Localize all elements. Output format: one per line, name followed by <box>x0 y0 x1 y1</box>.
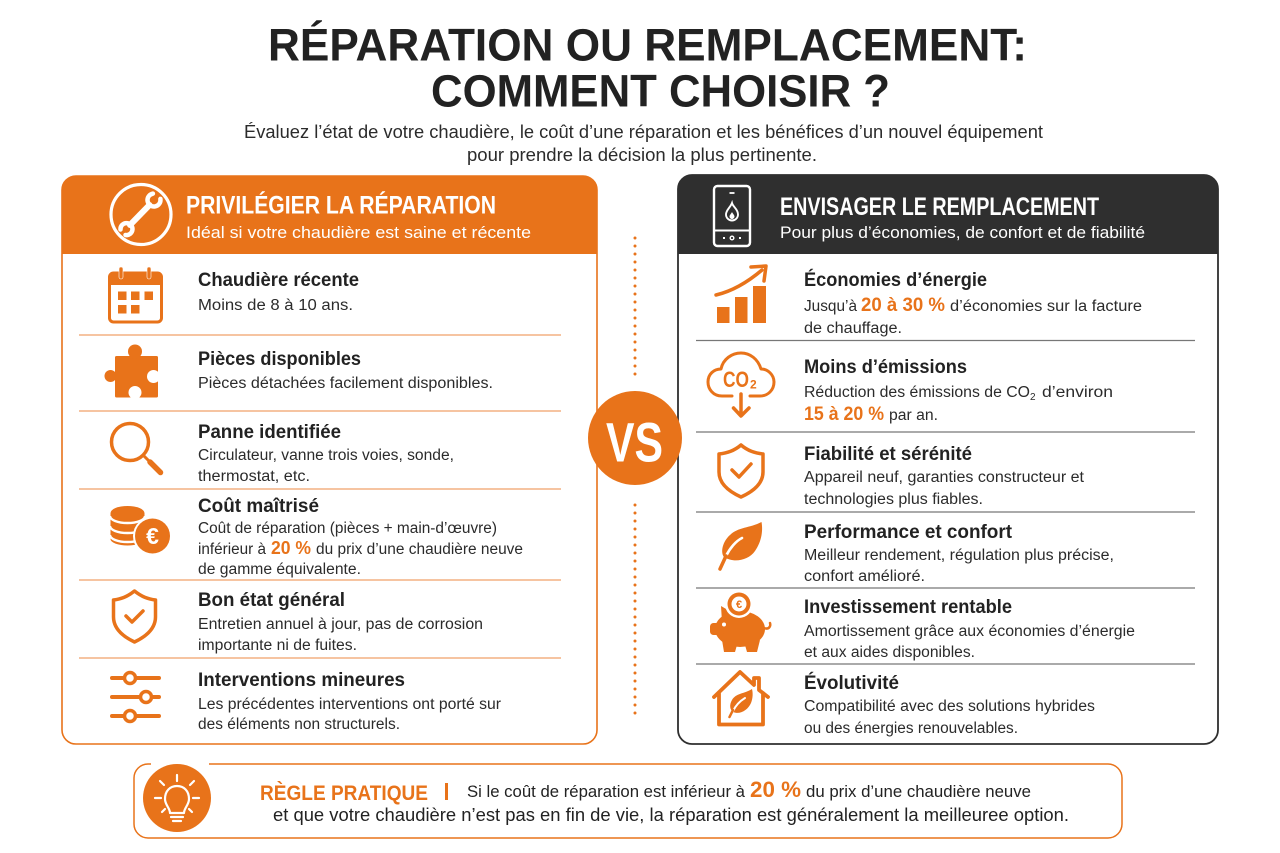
row: performance et confort: Performance et confort <box>804 522 1013 543</box>
row: panne identifiée: Panne identifiée <box>198 422 341 443</box>
row: bon état général: Entretien annuel à jour, pas de corrosion <box>198 616 483 633</box>
icon: wrench <box>111 184 171 244</box>
row: interventions mineures: des éléments non structurels. <box>198 716 400 733</box>
row: coût maîtrisé: 20 % <box>271 538 311 558</box>
row: pièces disponibles: Pièces disponibles <box>198 349 361 370</box>
row: économies d'énergie: Économies d’énergie <box>804 269 987 291</box>
icon: piggy bank <box>710 590 770 652</box>
row: panne identifiée <box>112 422 454 485</box>
row: panne identifiée: thermostat, etc. <box>198 468 310 485</box>
icon: sliders <box>112 672 159 722</box>
row: coût maîtrisé: inférieur à <box>198 541 266 558</box>
row: performance et confort: confort amélioré. <box>804 568 925 585</box>
row: chaudière récente: Moins de 8 à 10 ans. <box>198 297 353 314</box>
title: COMMENT CHOISIR ? <box>431 66 890 116</box>
row: performance et confort: Meilleur rendement, régulation plus précise, <box>804 547 1114 564</box>
panel header: réparation <box>62 176 597 254</box>
row: investissement rentable: et aux aides disponibles. <box>804 644 975 661</box>
row: moins d'émissions: 2 <box>1030 392 1036 403</box>
rule text: du prix d’une chaudière neuve <box>806 782 1031 801</box>
row: bon état général <box>114 590 483 654</box>
icon: light bulb <box>143 764 211 832</box>
icon: rising chart <box>716 266 766 323</box>
row: chaudière récente <box>109 267 359 322</box>
row: panne identifiée: Circulateur, vanne trois voies, sonde, <box>198 447 454 464</box>
row: économies d'énergie <box>716 266 1142 337</box>
icon: CO2 cloud: 2 <box>750 378 757 392</box>
panel: envisager le remplacement <box>678 175 1218 744</box>
title: RÉPARATION OU REMPLACEMENT: <box>268 20 1027 70</box>
row: moins d'émissions: 15 à 20 % <box>804 404 884 425</box>
row: moins d'émissions: par an. <box>889 407 938 424</box>
row: coût maîtrisé: du prix d’une chaudière neuve <box>316 541 523 558</box>
rule text: et que votre chaudière n’est pas en fin de vie, la réparation est généralement la meilleuree option. <box>273 805 1069 825</box>
row: économies d'énergie: 20 à 30 % <box>861 295 945 316</box>
icon: piggy bank: € <box>736 599 742 611</box>
dotted connector bottom <box>634 505 636 716</box>
row: évolutivité <box>714 672 1095 737</box>
icon: CO2 cloud: CO <box>723 367 749 392</box>
icon: magnifier <box>112 424 160 472</box>
label: règle pratique: RÈGLE PRATIQUE <box>260 782 428 805</box>
panel: privilégier la réparation <box>62 176 597 744</box>
rule text: 20 % <box>750 777 801 802</box>
icon: leaf <box>720 522 762 569</box>
icon: coins with euro <box>110 506 172 556</box>
row: moins d'émissions <box>708 353 1113 425</box>
VS badge <box>588 391 682 485</box>
subheading: remplacement: Pour plus d’économies, de confort et de fiabilité <box>780 223 1145 242</box>
icon: CO2 cloud <box>708 353 774 416</box>
icon: calendar <box>109 267 162 322</box>
row: fiabilité et sérénité: technologies plus fiables. <box>804 491 983 508</box>
row: économies d'énergie: de chauffage. <box>804 320 902 337</box>
icon: eco house <box>714 672 768 724</box>
row: chaudière récente: Chaudière récente <box>198 270 359 291</box>
row: interventions mineures <box>112 670 501 733</box>
row: évolutivité: Compatibilité avec des solutions hybrides <box>804 698 1095 715</box>
row: évolutivité: ou des énergies renouvelables. <box>804 720 1018 737</box>
rule text: Si le coût de réparation est inférieur à <box>467 782 746 801</box>
row: bon état général: importante ni de fuites. <box>198 637 357 654</box>
row: performance et confort <box>720 522 1114 585</box>
subtitle <box>244 122 1043 165</box>
row: pièces disponibles: Pièces détachées facilement disponibles. <box>198 375 493 392</box>
icon: boiler <box>714 186 750 246</box>
subheading: réparation: Idéal si votre chaudière est saine et récente <box>186 223 531 242</box>
row: économies d'énergie: d’économies sur la facture <box>950 298 1142 315</box>
row: coût maîtrisé: de gamme équivalente. <box>198 561 361 578</box>
row: bon état général: Bon état général <box>198 590 345 611</box>
icon: shield check <box>719 445 763 497</box>
row: interventions mineures: Interventions mineures <box>198 670 405 691</box>
row: interventions mineures: Les précédentes interventions ont porté sur <box>198 696 501 713</box>
icon: coins with euro: € <box>146 523 159 549</box>
callout: règle pratique <box>134 758 1122 838</box>
row: investissement rentable: Investissement rentable <box>804 597 1012 618</box>
icon: shield check <box>114 591 156 642</box>
row: coût maîtrisé: Coût maîtrisé <box>198 496 319 517</box>
row: investissement rentable: Amortissement grâce aux économies d’énergie <box>804 623 1135 640</box>
icon: puzzle <box>104 344 160 399</box>
row: moins d'émissions: Moins d’émissions <box>804 357 967 378</box>
row: coût maîtrisé <box>110 496 523 578</box>
row: moins d'émissions: Réduction des émissions de CO <box>804 384 1030 401</box>
VS badge: VS <box>606 410 663 474</box>
row: fiabilité et sérénité: Appareil neuf, garanties constructeur et <box>804 469 1085 486</box>
panel header: remplacement <box>678 175 1218 254</box>
subtitle: Évaluez l’état de votre chaudière, le coût d’une réparation et les bénéfices d’un nouvel équipement <box>244 122 1043 142</box>
row: fiabilité et sérénité <box>719 444 1085 508</box>
row: économies d'énergie: Jusqu’à <box>804 298 857 315</box>
row: moins d'émissions: d’environ <box>1042 384 1113 401</box>
title <box>268 20 1027 116</box>
rule text <box>273 777 1069 825</box>
subtitle: pour prendre la décision la plus pertinente. <box>467 145 817 165</box>
heading: réparation: PRIVILÉGIER LA RÉPARATION <box>186 190 496 220</box>
row: coût maîtrisé: Coût de réparation (pièces + main-d’œuvre) <box>198 520 497 537</box>
heading: remplacement: ENVISAGER LE REMPLACEMENT <box>780 193 1099 221</box>
row: fiabilité et sérénité: Fiabilité et sérénité <box>804 444 972 465</box>
row: investissement rentable <box>710 590 1135 661</box>
dotted connector top <box>634 238 636 378</box>
row: pièces disponibles <box>104 344 493 399</box>
row: évolutivité: Évolutivité <box>804 672 899 694</box>
